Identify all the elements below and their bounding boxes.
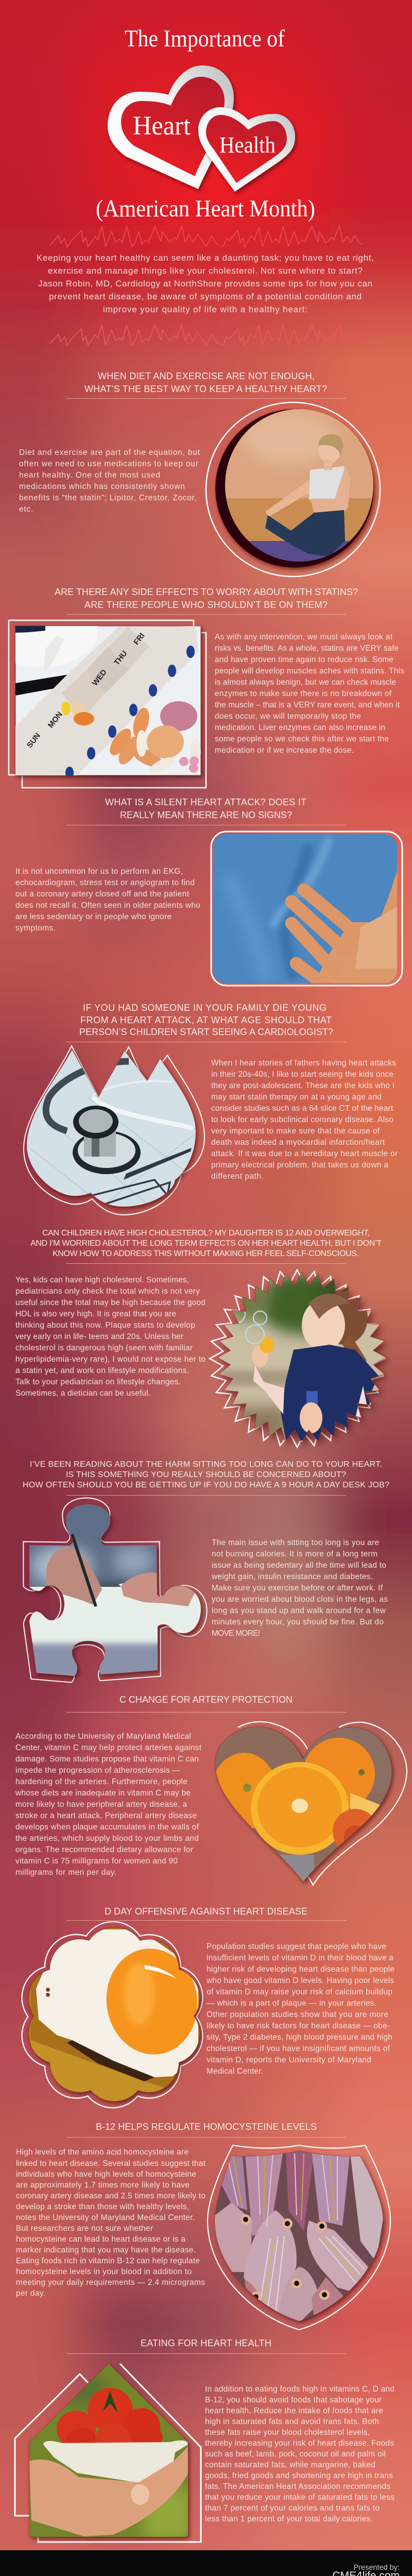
intro text: Jason Robin, MD, Cardiology at NorthShore provides some tips for how you can bbox=[38, 279, 372, 289]
text: vitamin C: develops when plaque accumulates in the walls of bbox=[15, 1823, 199, 1832]
text: vitamin C: whose diets are inadequate in vitamin C may be bbox=[15, 1789, 191, 1798]
heading: when diet and exercise are not enough bbox=[66, 371, 346, 399]
text: sitting too long: The main issue with sitting too long is you are bbox=[212, 1538, 379, 1547]
word Health: Health bbox=[219, 132, 276, 158]
image: pill organizer in square frames: SUN bbox=[25, 732, 42, 750]
text: vitamin C: vitamin C is 75 milligrams for women and 90 bbox=[15, 1857, 178, 1866]
intro text: improve your quality of life with a healthy heart: bbox=[103, 304, 307, 314]
heading: children cholesterol bbox=[30, 1229, 382, 1263]
image: stethoscope in droplet shape bbox=[21, 1046, 204, 1215]
text: vitamin B-12: High levels of the amino acid homocysteine are bbox=[16, 2148, 188, 2157]
intro text: exercise and manage things like your cholesterol. Not sure where to start? bbox=[48, 266, 363, 276]
subtitle: American Heart Month: (American Heart Month) bbox=[96, 195, 315, 222]
intro text: prevent heart disease, be aware of symptoms of a potential condition and bbox=[49, 292, 362, 301]
text: family history: they are post-adolescent. These are the kids who I bbox=[211, 1081, 394, 1090]
intro text: Keeping your heart healthy can seem like a daunting task; you have to eat right, bbox=[37, 253, 374, 263]
heading: children cholesterol: CAN CHILDREN HAVE HIGH CHOLESTEROL? MY DAUGHTER IS 12 AND OVERWEIGHT, bbox=[42, 1229, 370, 1238]
text: diet and exercise: Diet and exercise are part of the equation, but bbox=[19, 448, 200, 457]
text: eating for heart health: such as beef, lamb, pork, coconut oil and palm oil bbox=[205, 2450, 386, 2459]
text: children cholesterol: Yes, kids can have high cholesterol. Sometimes, bbox=[15, 1276, 189, 1284]
text: family history: different path. bbox=[211, 1172, 264, 1181]
text: eating for heart health bbox=[205, 2385, 394, 2523]
heading: when diet and exercise are not enough: WHEN DIET AND EXERCISE ARE NOT ENOUGH, bbox=[98, 371, 315, 381]
text: vitamin D: of vitamin D may raise your risk of calcium buildup bbox=[207, 1988, 392, 1996]
text: vitamin D: Medical Center. bbox=[207, 2067, 263, 2076]
text: vitamin B-12: develop a stroke than those with healthy levels, bbox=[16, 2202, 189, 2211]
word Heart: Heart bbox=[133, 111, 191, 141]
text: statin side effects: As with any intervention, we must always look at bbox=[215, 633, 393, 641]
text: sitting too long: Make sure you exercise before or after work. If bbox=[212, 1584, 383, 1592]
text: vitamin B-12 bbox=[16, 2148, 206, 2298]
heading: when diet and exercise are not enough: WHAT’S THE BEST WAY TO KEEP A HEALTHY HEART? bbox=[84, 384, 327, 394]
image: pill organizer in square frames: WED bbox=[91, 668, 109, 687]
heading: sitting too long bbox=[23, 1460, 389, 1495]
text: eating for heart health: that you reduce your intake of saturated fats to less bbox=[205, 2493, 394, 2502]
text: statin side effects: medication or if we increase the dose. bbox=[215, 746, 354, 755]
presenter credit: Presented by: bbox=[354, 2564, 400, 2572]
text: eating for heart health: heart health. Reduce the intake of foods that are bbox=[205, 2406, 383, 2415]
text: children cholesterol: very early on in life- teens and 20s. Unless her bbox=[15, 1332, 183, 1341]
image: hand writing in puzzle piece bbox=[23, 1498, 207, 1682]
text: vitamin B-12: homocysteine can lead to heart disease or is a bbox=[16, 2235, 185, 2244]
text: diet and exercise: often we need to use medications to keep our bbox=[19, 460, 198, 468]
text: sitting too long: weight gain, insulin resistance and diabetes. bbox=[211, 1572, 373, 1581]
text: eating for heart health: contain saturated fats, while margarine, baked bbox=[205, 2461, 375, 2469]
text: vitamin B-12: are approximately 1.7 times more likely to have bbox=[16, 2181, 190, 2190]
text: vitamin C: stroke or a heart attack. Peripheral artery disease bbox=[15, 1811, 197, 1820]
text: statin side effects: some people so we check this after we start the bbox=[215, 735, 389, 743]
text: vitamin D: insufficient levels of vitamin D in their blood have a bbox=[207, 1954, 393, 1962]
text: family history: may start statin therapy on at a young age and bbox=[211, 1093, 382, 1101]
heading: vitamin D: D DAY OFFENSIVE AGAINST HEART DISEASE bbox=[105, 1906, 307, 1917]
heading: vitamin C: C CHANGE FOR ARTERY PROTECTION bbox=[119, 1694, 293, 1705]
image: pill organizer in square frames: MON bbox=[46, 710, 64, 730]
text: eating for heart health: B-12, you should avoid foods that sabotage your bbox=[205, 2396, 382, 2404]
heading: family history: IF YOU HAD SOMEONE IN YOUR FAMILY DIE YOUNG bbox=[83, 1003, 327, 1013]
image: pill organizer in square frames: FRI bbox=[132, 632, 147, 647]
presenter credit bbox=[332, 2564, 400, 2576]
heartbeat line bottom bbox=[50, 324, 363, 346]
text: vitamin D: who have good vitamin D levels. Having poor levels bbox=[206, 1976, 394, 1985]
text: sitting too long: long as you stand up and walk around for a few bbox=[212, 1606, 386, 1615]
image: woman meditating in circle bbox=[206, 402, 380, 577]
text: children cholesterol: useful since the total may be high because the good bbox=[15, 1298, 205, 1307]
text: sitting too long: MOVE MORE! bbox=[212, 1629, 260, 1638]
text: vitamin C: damage. Some studies propose that vitamin C can bbox=[15, 1755, 199, 1764]
text: vitamin B-12: individuals who have high levels of homocysteine bbox=[16, 2170, 196, 2179]
text: eating for heart health: less than 1 percent of your total daily calories. bbox=[205, 2515, 373, 2523]
text: vitamin B-12: But researchers are not sure whether bbox=[16, 2224, 153, 2233]
small heart bbox=[198, 107, 295, 192]
heading: silent heart attack: WHAT IS A SILENT HEART ATTACK? DOES IT bbox=[105, 797, 306, 807]
text: statin side effects: risks vs. benefits. As a whole, statins are VERY safe bbox=[215, 644, 399, 653]
text: statin side effects: the muscle – that is a VERY rare event, and when it bbox=[215, 701, 400, 709]
text: vitamin D: higher risk of developing heart disease than people bbox=[207, 1965, 394, 1974]
text: children cholesterol: Sometimes, a dietician can be useful. bbox=[15, 1389, 150, 1398]
image: pill organizer in square frames bbox=[8, 619, 207, 788]
text: vitamin B-12: linked to heart disease. Several studies suggest that bbox=[16, 2159, 206, 2168]
heading: sitting too long: I’VE BEEN READING ABOUT THE HARM SITTING TOO LONG CAN DO TO YOUR HEART. bbox=[30, 1460, 382, 1469]
heading: silent heart attack bbox=[66, 797, 346, 825]
heading: side effects: ARE THERE PEOPLE WHO SHOULDN’T BE ON THEM? bbox=[84, 600, 328, 610]
text: statin side effects: does occur, we will temporarily stop the bbox=[215, 712, 361, 721]
text: vitamin B-12: meeting your daily requirements — 2.4 micrograms bbox=[16, 2278, 205, 2287]
text: family history bbox=[211, 1059, 398, 1181]
text: children cholesterol: pediatricians only check the total which is not very bbox=[15, 1287, 200, 1296]
text: vitamin B-12: homocysteine levels in your blood in addition to bbox=[16, 2267, 192, 2276]
image: fried egg in flower shape bbox=[22, 1922, 204, 2108]
text: vitamin C: impede the progression of atherosclerosis — bbox=[15, 1766, 180, 1775]
heartbeat line top bbox=[50, 226, 363, 248]
text: family history: primary electrical problem, that takes us down a bbox=[211, 1161, 388, 1170]
text: vitamin C: organs. The recommended dietary allowance for bbox=[15, 1845, 193, 1854]
text: family history: When I hear stories of fathers having heart attacks bbox=[211, 1059, 396, 1067]
heading: family history bbox=[66, 1003, 346, 1042]
image: hand on chest in rounded frame bbox=[211, 832, 402, 987]
text: family history: to look for early subclinical coronary disease. Also bbox=[211, 1115, 393, 1124]
text: silent heart attack: It is not uncommon for us to perform an EKG, bbox=[15, 867, 183, 876]
footer: LOVE photo panel bbox=[0, 2550, 412, 2576]
heading: children cholesterol: AND I’M WORRIED ABOUT THE LONG TERM EFFECTS ON HER HEART HEALTH, BUT I DON’T bbox=[30, 1239, 382, 1248]
text: eating for heart health: thereby increasing your risk of heart disease. Foods bbox=[205, 2439, 394, 2448]
heading: family history: FROM A HEART ATTACK, AT WHAT AGE SHOULD THAT bbox=[80, 1015, 332, 1025]
text: statin side effects: people will develop muscles aches with statins. This bbox=[215, 667, 404, 675]
text: children cholesterol: HDL is also very high. It is great that you are bbox=[15, 1310, 176, 1318]
text: children cholesterol: Talk to your pediatrician on lifestyle changes. bbox=[15, 1378, 181, 1386]
text: family history: very important to make sure that the cause of bbox=[211, 1127, 380, 1136]
text: eating for heart health: than 7 percent of your calories and trans fats to bbox=[205, 2504, 380, 2513]
heading: eating for heart health: EATING FOR HEART HEALTH bbox=[141, 2338, 271, 2348]
text: vitamin C bbox=[15, 1732, 202, 1877]
text: vitamin B-12: notes the University of Maryland Medical Center. bbox=[16, 2213, 195, 2222]
text: statin side effects: enzymes to make sure there is no breakdown of bbox=[215, 689, 392, 698]
text: diet and exercise: heart healthy. One of the most used bbox=[19, 471, 160, 480]
text: sitting too long: issue as being sedentary all the time will lead to bbox=[212, 1561, 386, 1570]
text: eating for heart health: goods, fried goods and shortening are high in trans bbox=[205, 2471, 393, 2480]
text: vitamin C: According to the University of Maryland Medical bbox=[15, 1732, 191, 1741]
text: sitting too long: you are worried about blood clots in the legs, as bbox=[212, 1595, 388, 1604]
text: eating for heart health: high in saturated fats and avoid trans fats. Both bbox=[205, 2417, 379, 2426]
text: vitamin C: Center, vitamin C may help protect arteries against bbox=[15, 1743, 202, 1752]
icon: two paper hearts with Heart Health bbox=[108, 65, 295, 192]
text: statin side effects bbox=[215, 633, 404, 755]
text: eating for heart health: these fats raise your blood cholesterol levels, bbox=[205, 2428, 370, 2437]
text: diet and exercise bbox=[19, 448, 200, 514]
text: children cholesterol: thinking about this now. Plaque starts to develop bbox=[15, 1321, 195, 1330]
heading: side effects: ARE THERE ANY SIDE EFFECTS TO WORRY ABOUT WITH STATINS? bbox=[55, 587, 358, 597]
heading: silent heart attack: REALLY MEAN THERE ARE NO SIGNS? bbox=[120, 810, 292, 820]
image: pill organizer in square frames: THU bbox=[112, 649, 129, 667]
text: vitamin D: cholesterol — if you have insignificant amounts of bbox=[207, 2044, 390, 2053]
text: statin side effects: is almost always benign, but we can check muscle bbox=[215, 678, 396, 687]
text: vitamin C: the arteries, which supply blood to your limbs and bbox=[15, 1834, 199, 1843]
text: vitamin D: — which is a part of plaque — in your arteries. bbox=[207, 1999, 376, 2008]
heading: sitting too long: IS THIS SOMETHING YOU REALLY SHOULD BE CONCERNED ABOUT? bbox=[66, 1470, 346, 1479]
text: sitting too long bbox=[211, 1538, 388, 1638]
image: fish in shield shape bbox=[208, 2145, 390, 2330]
text: diet and exercise: etc. bbox=[19, 505, 33, 514]
heading: side effects bbox=[55, 587, 358, 614]
text: family history: death was indeed a myocardial infarction/heart bbox=[211, 1138, 385, 1147]
text: sitting too long: minutes every hour, you should be fine. But do bbox=[212, 1618, 384, 1626]
text: family history: attack. If it was due to a hereditary heart muscle or bbox=[211, 1149, 398, 1158]
title: The Importance of: The Importance of bbox=[125, 25, 285, 52]
text: vitamin D: vitamin D, reports the University of Maryland bbox=[207, 2056, 371, 2064]
text: eating for heart health: fats. The American Heart Association recommends bbox=[205, 2482, 390, 2491]
text: diet and exercise: benefits is “the statin”; Lipitor, Crestor, Zocor, bbox=[19, 494, 197, 502]
text: diet and exercise: medications which has consistently shown bbox=[19, 482, 185, 491]
text: vitamin D: sity, Type 2 diabetes, high blood pressure and high bbox=[207, 2033, 392, 2042]
text: children cholesterol: hyperlipidemia-very rare), I would not expose her to bbox=[15, 1355, 205, 1364]
text: vitamin D: Population studies suggest that people who have bbox=[207, 1942, 386, 1951]
text: children cholesterol: cholesterol is dangerous high (seen with familiar bbox=[15, 1344, 193, 1352]
intro text bbox=[37, 253, 374, 314]
text: vitamin B-12: marker indicating that you may have the disease. bbox=[16, 2246, 196, 2255]
heading: sitting too long: HOW OFTEN SHOULD YOU BE GETTING UP IF YOU DO HAVE A 9 HOUR A DAY DESK JOB? bbox=[23, 1481, 389, 1489]
text: silent heart attack: echocardiogram, stress test or angiogram to find bbox=[15, 878, 195, 887]
text: silent heart attack: are less sedentary or in people who ignore bbox=[15, 912, 171, 921]
text: vitamin C: hardening of the arteries. Furthermore, people bbox=[15, 1777, 187, 1786]
text: vitamin B-12: per day. bbox=[16, 2289, 45, 2298]
text: children cholesterol bbox=[15, 1276, 205, 1398]
text: vitamin C: more likely to have peripheral artery disease, a bbox=[15, 1800, 187, 1809]
text: silent heart attack bbox=[15, 867, 200, 933]
text: vitamin B-12: Eating foods rich in vitamin B-12 can help regulate bbox=[16, 2257, 200, 2265]
text: silent heart attack: out a coronary artery closed off and the patient bbox=[15, 890, 190, 899]
text: children cholesterol: a statin yet, and work on lifestyle modifications. bbox=[15, 1366, 189, 1375]
text: vitamin C: milligrams for men per day. bbox=[15, 1868, 116, 1877]
heading: vitamin B-12: B-12 HELPS REGULATE HOMOCYSTEINE LEVELS bbox=[96, 2122, 317, 2132]
text: sitting too long: not burning calories. It is more of a long term bbox=[212, 1550, 377, 1558]
text: silent heart attack: symptoms. bbox=[15, 924, 56, 933]
text: family history: in their 20s-40s, I like to start seeing the kids once bbox=[211, 1070, 393, 1079]
large heart bbox=[108, 65, 234, 189]
text: vitamin D bbox=[206, 1942, 394, 2076]
text: vitamin B-12: coronary artery disease and 2.5 times more likely to bbox=[16, 2192, 205, 2200]
text: statin side effects: and have proven time again to reduce risk. Some bbox=[215, 655, 393, 664]
text: statin side effects: medication. Liver enzymes can also increase in bbox=[215, 723, 385, 732]
image: oranges in heart bbox=[211, 1722, 407, 1886]
text: vitamin D: likely to have risk factors for heart disease — obe- bbox=[207, 2022, 390, 2030]
image: tomatoes in bowl in house shape bbox=[15, 2362, 201, 2542]
text: family history: consider studies such as a 64 slice CT of the heart bbox=[211, 1104, 393, 1113]
text: silent heart attack: does not recall it. Often seen in older patients who bbox=[15, 901, 200, 910]
image: girl blowing bubbles in starburst bbox=[210, 1267, 389, 1448]
text: vitamin D: Other population studies show that you are more bbox=[207, 2010, 388, 2019]
text: eating for heart health: In addition to eating foods high in vitamins C, D and bbox=[205, 2385, 394, 2394]
heading: family history: PERSON’S CHILDREN START SEEING A CARDIOLOGIST? bbox=[79, 1027, 333, 1037]
heading: children cholesterol: KNOW HOW TO ADDRESS THIS WITHOUT MAKING HER FEEL SELF-CONSCIOUS. bbox=[53, 1249, 359, 1258]
